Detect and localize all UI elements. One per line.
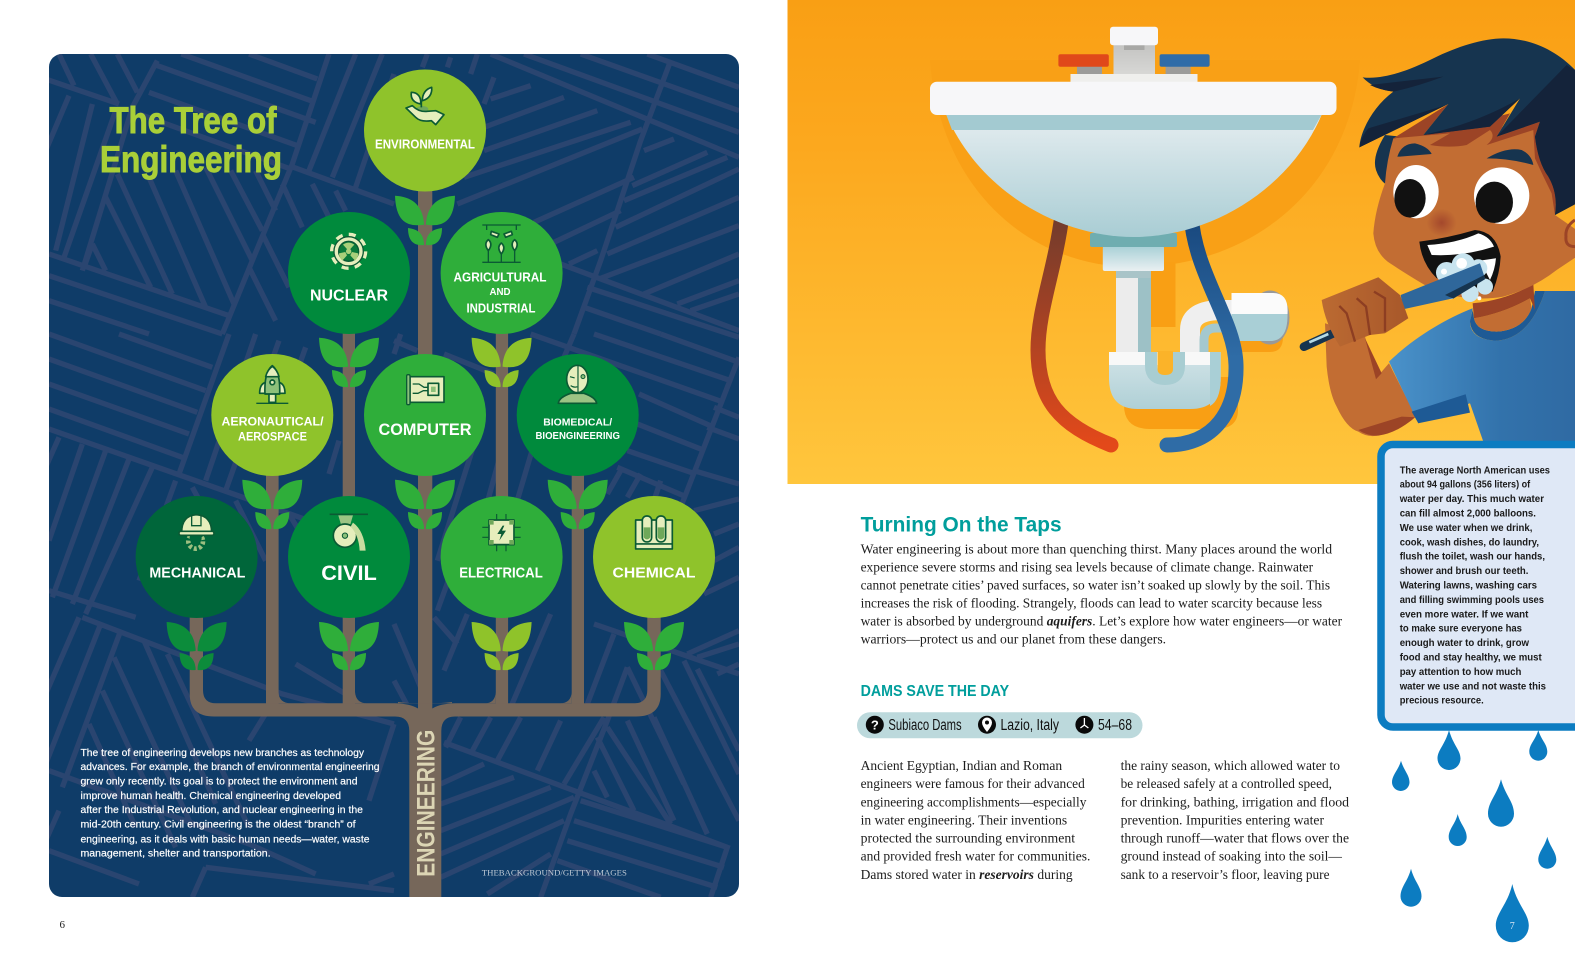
heading: turning on the taps: Turning On the Taps	[861, 513, 1062, 537]
sink shadow	[930, 60, 1360, 267]
text block: intro	[861, 541, 1343, 647]
background street pattern	[46, 54, 739, 897]
node: agricultural and industrial: INDUSTRIAL	[466, 302, 536, 316]
text block: tree description: management, shelter and transportation.	[80, 849, 270, 860]
page number left: 6	[60, 919, 66, 931]
collar and neck	[1470, 284, 1545, 341]
node: aeronautical aerospace: AERONAUTICAL/	[222, 414, 324, 428]
water usage callout: can fill almost 2,000 balloons.	[1400, 508, 1536, 520]
text block: intro: cannot penetrate cities’ paved surfaces, so water isn’t soaked up slowly by the soil. This	[861, 578, 1330, 593]
node: environmental: ENVIRONMENTAL	[375, 138, 475, 152]
node: environmental	[364, 70, 486, 192]
title: The Tree of	[110, 100, 277, 141]
leaves	[167, 196, 684, 670]
text block: right column: for drinking, bathing, irrigation and flood	[1121, 795, 1349, 810]
node: mechanical: MECHANICAL	[149, 566, 246, 582]
page number right: 7	[1510, 921, 1515, 932]
trunk notches	[395, 703, 455, 708]
info pill: dam, place, dates	[857, 712, 1142, 738]
water usage callout: food and stay healthy, we must	[1400, 652, 1542, 664]
node: aeronautical aerospace	[211, 354, 333, 476]
cold water hose	[1167, 215, 1236, 445]
icon: irrigated plants	[482, 225, 521, 262]
info pill: dam, place, dates: 54–68	[1098, 717, 1132, 734]
mouth	[1419, 230, 1501, 292]
sink basin	[930, 82, 1336, 237]
face	[1373, 123, 1575, 299]
forehead shadow	[1393, 104, 1556, 215]
text block: intro: Water engineering is about more than quenching thirst. Many places around the world	[861, 541, 1332, 556]
text block: tree description: after the Industrial Revolution, and nuclear engineering in the	[80, 805, 363, 816]
node: chemical	[593, 496, 715, 618]
text block: tree description: The tree of engineering develops new branches as technology	[80, 748, 364, 759]
water usage callout: The average North American uses	[1400, 465, 1550, 476]
water usage callout: Watering lawns, washing cars	[1400, 580, 1537, 592]
hot water hose	[1038, 215, 1111, 445]
text block: intro: warriors—protect us and our planet from these dangers.	[861, 632, 1166, 647]
text block: tree description: mid-20th century. Civil engineering is the oldest “branch” of	[80, 820, 356, 831]
info pill: dam, place, dates: Lazio, Italy	[1000, 717, 1059, 734]
water usage callout: about 94 gallons (356 liters) of	[1400, 480, 1531, 491]
sink drain pipes	[1090, 233, 1290, 409]
text block: tree description	[80, 748, 380, 860]
node: aeronautical aerospace: AEROSPACE	[238, 430, 307, 444]
text block: right column: be released safely at a controlled speed,	[1121, 776, 1332, 791]
text block: intro: increases the risk of flooding. Strangely, floods can lead to water scarcity because less	[861, 596, 1322, 611]
water usage callout: pay attention to how much	[1400, 667, 1521, 678]
water usage callout: flush the toilet, wash our hands,	[1400, 552, 1545, 563]
text block: right column	[1121, 758, 1349, 882]
water drops	[1392, 730, 1556, 942]
node: civil: CIVIL	[321, 562, 377, 585]
arm	[1325, 323, 1416, 436]
icon: clock	[1075, 716, 1093, 734]
text block: right column: ground instead of soaking into the soil—	[1121, 849, 1342, 864]
node: electrical: ELECTRICAL	[459, 566, 543, 582]
icon: half robot face	[558, 365, 597, 403]
info pill: dam, place, dates: Subiaco Dams	[888, 717, 962, 734]
node: electrical	[441, 496, 563, 618]
node: computer	[364, 354, 486, 476]
text block: right column: the rainy season, which allowed water to	[1121, 758, 1340, 773]
title: Engineering	[100, 139, 282, 180]
text block: left column: engineers were famous for their advanced	[861, 776, 1085, 791]
icon: wheel caster	[330, 514, 368, 551]
icon: nuclear gear	[333, 235, 365, 267]
icon: location pin	[978, 716, 996, 734]
icon: question mark: ?	[871, 718, 879, 732]
node: biomedical bioengineering: BIOMEDICAL/	[543, 416, 612, 428]
water usage callout: shower and brush our teeth.	[1400, 566, 1528, 577]
icon: circuit board	[407, 375, 444, 405]
node: chemical: CHEMICAL	[612, 566, 696, 582]
text block: intro: water is absorbed by underground aquifers. Let’s explore how water engineers—or water	[861, 614, 1343, 629]
left sideburn	[1375, 135, 1400, 185]
trunk label: ENGINEERING	[412, 730, 440, 877]
text block: left column: and provided fresh water for communities.	[861, 849, 1090, 864]
water usage callout: water per day. This much water	[1399, 494, 1544, 505]
text block: right column: sank to a reservoir’s floor, leaving pure	[1121, 867, 1330, 882]
panel: tree of engineering	[46, 54, 739, 900]
text block: left column: Ancient Egyptian, Indian and Roman	[861, 758, 1062, 773]
tree branches and trunk	[190, 190, 661, 900]
text block: tree description: grew only recently. Its goal is to protect the environment and	[80, 777, 358, 788]
text block: tree description: advances. For example, the branch of environmental engineering	[80, 762, 380, 773]
ear	[1566, 220, 1575, 247]
water usage callout	[1381, 444, 1575, 727]
node: nuclear	[288, 212, 410, 334]
node: mechanical	[136, 496, 258, 618]
text block: left column: engineering accomplishments—especially	[861, 795, 1087, 810]
hand	[1322, 277, 1408, 347]
text block: right column: through runoff—water that flows over the	[1121, 831, 1349, 846]
text block: left column	[861, 758, 1090, 882]
text block: tree description: engineering, as it deals with basic human needs—water, waste	[80, 834, 370, 845]
text block: tree description: improve human health. Chemical engineering developed	[80, 791, 341, 802]
eyes	[1393, 165, 1529, 224]
hair	[1359, 38, 1575, 215]
faucet and handles	[1058, 27, 1210, 82]
water usage callout: even more water. If we want	[1400, 609, 1529, 620]
node: biomedical bioengineering: BIOENGINEERING	[535, 430, 620, 442]
water usage callout: We use water when we drink,	[1400, 523, 1532, 534]
water usage callout: enough water to drink, grow	[1400, 638, 1530, 649]
icon: rocket	[256, 366, 288, 403]
icon: test tubes	[636, 516, 672, 549]
title	[100, 100, 282, 180]
back hair	[1545, 243, 1575, 275]
text block: left column: Dams stored water in reservoirs during	[861, 867, 1073, 882]
icon: question mark	[866, 716, 884, 734]
subheading: dams save the day: DAMS SAVE THE DAY	[861, 683, 1009, 700]
text block: left column: protected the surrounding environment	[861, 831, 1075, 846]
water usage callout: cook, wash dishes, do laundry,	[1400, 537, 1539, 548]
water usage callout: and filling swimming pools uses	[1400, 595, 1544, 606]
node: computer: COMPUTER	[378, 421, 472, 439]
nose	[1427, 209, 1457, 237]
water usage callout: to make sure everyone has	[1400, 624, 1522, 635]
water usage callout: water we use and not waste this	[1399, 681, 1546, 692]
text block: intro: experience severe storms and rising sea levels because of climate change. Rainwater	[861, 559, 1314, 574]
node: agricultural and industrial: AND	[490, 287, 510, 298]
water usage callout: precious resource.	[1400, 696, 1484, 707]
icon: chip with bolt	[482, 514, 521, 551]
toothbrush	[1304, 253, 1493, 347]
node: agricultural and industrial: AGRICULTURAL	[454, 270, 547, 284]
text block: left column: in water engineering. Their inventions	[861, 813, 1067, 828]
node: agricultural and industrial	[441, 212, 563, 334]
shirt sleeve shade	[1412, 394, 1470, 423]
node: civil	[288, 496, 410, 618]
eyebrows	[1397, 143, 1533, 165]
icon: hand holding plant	[406, 87, 444, 125]
orange background	[788, 0, 1575, 484]
node: biomedical bioengineering	[517, 354, 639, 476]
illustration: sink and boy brushing teeth	[788, 0, 1575, 484]
text block: right column: prevention. Impurities entering water	[1121, 813, 1324, 828]
photo credit: THEBACKGROUND/GETTY IMAGES	[482, 868, 627, 878]
boy	[1304, 38, 1575, 442]
shirt	[1389, 291, 1575, 442]
icon: helmet and gear	[179, 515, 214, 549]
node: nuclear: NUCLEAR	[310, 288, 388, 304]
